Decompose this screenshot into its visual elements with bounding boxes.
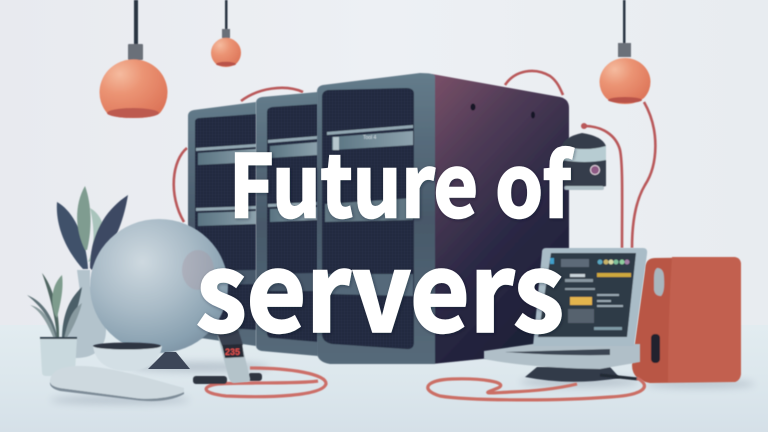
server: back middle	[256, 92, 318, 356]
cable right	[428, 375, 644, 400]
laptop screen widgets	[550, 258, 631, 330]
lens device on cable	[562, 123, 606, 190]
server front frame	[317, 73, 435, 364]
table surface	[0, 325, 768, 432]
server drive bays	[325, 125, 413, 296]
background wall	[0, 0, 768, 330]
pendant lamp: right	[600, 0, 650, 104]
shadows on the table	[50, 362, 755, 404]
server bolts	[470, 104, 535, 118]
server mesh panel	[322, 88, 414, 349]
thermostat remote	[217, 329, 250, 383]
pendant lamp: large left	[100, 0, 168, 118]
metallic sphere	[90, 219, 228, 353]
plant: small pot	[27, 273, 82, 376]
laptop base	[484, 344, 640, 369]
laptop lid	[533, 248, 647, 346]
pendant lamp: small centre	[211, 0, 241, 67]
plant: tall in vase	[57, 186, 128, 358]
server: front large unit	[317, 73, 569, 364]
red cables behind servers	[174, 71, 655, 248]
red box speaker	[632, 257, 741, 383]
white mouse device	[50, 366, 184, 401]
title line: Future of: Future of	[229, 117, 574, 242]
bowl	[93, 342, 162, 371]
title	[196, 117, 574, 364]
laptop	[484, 248, 647, 382]
title line: servers: servers	[196, 208, 564, 364]
sphere stand	[148, 352, 190, 369]
laptop screen	[538, 253, 636, 337]
server: back left	[188, 102, 256, 346]
server drive bays: Tool 4	[363, 135, 377, 141]
cable left with plug	[193, 368, 326, 397]
laptop stand	[525, 367, 620, 382]
thermostat remote: 235	[225, 347, 240, 357]
server side panel	[432, 74, 569, 364]
